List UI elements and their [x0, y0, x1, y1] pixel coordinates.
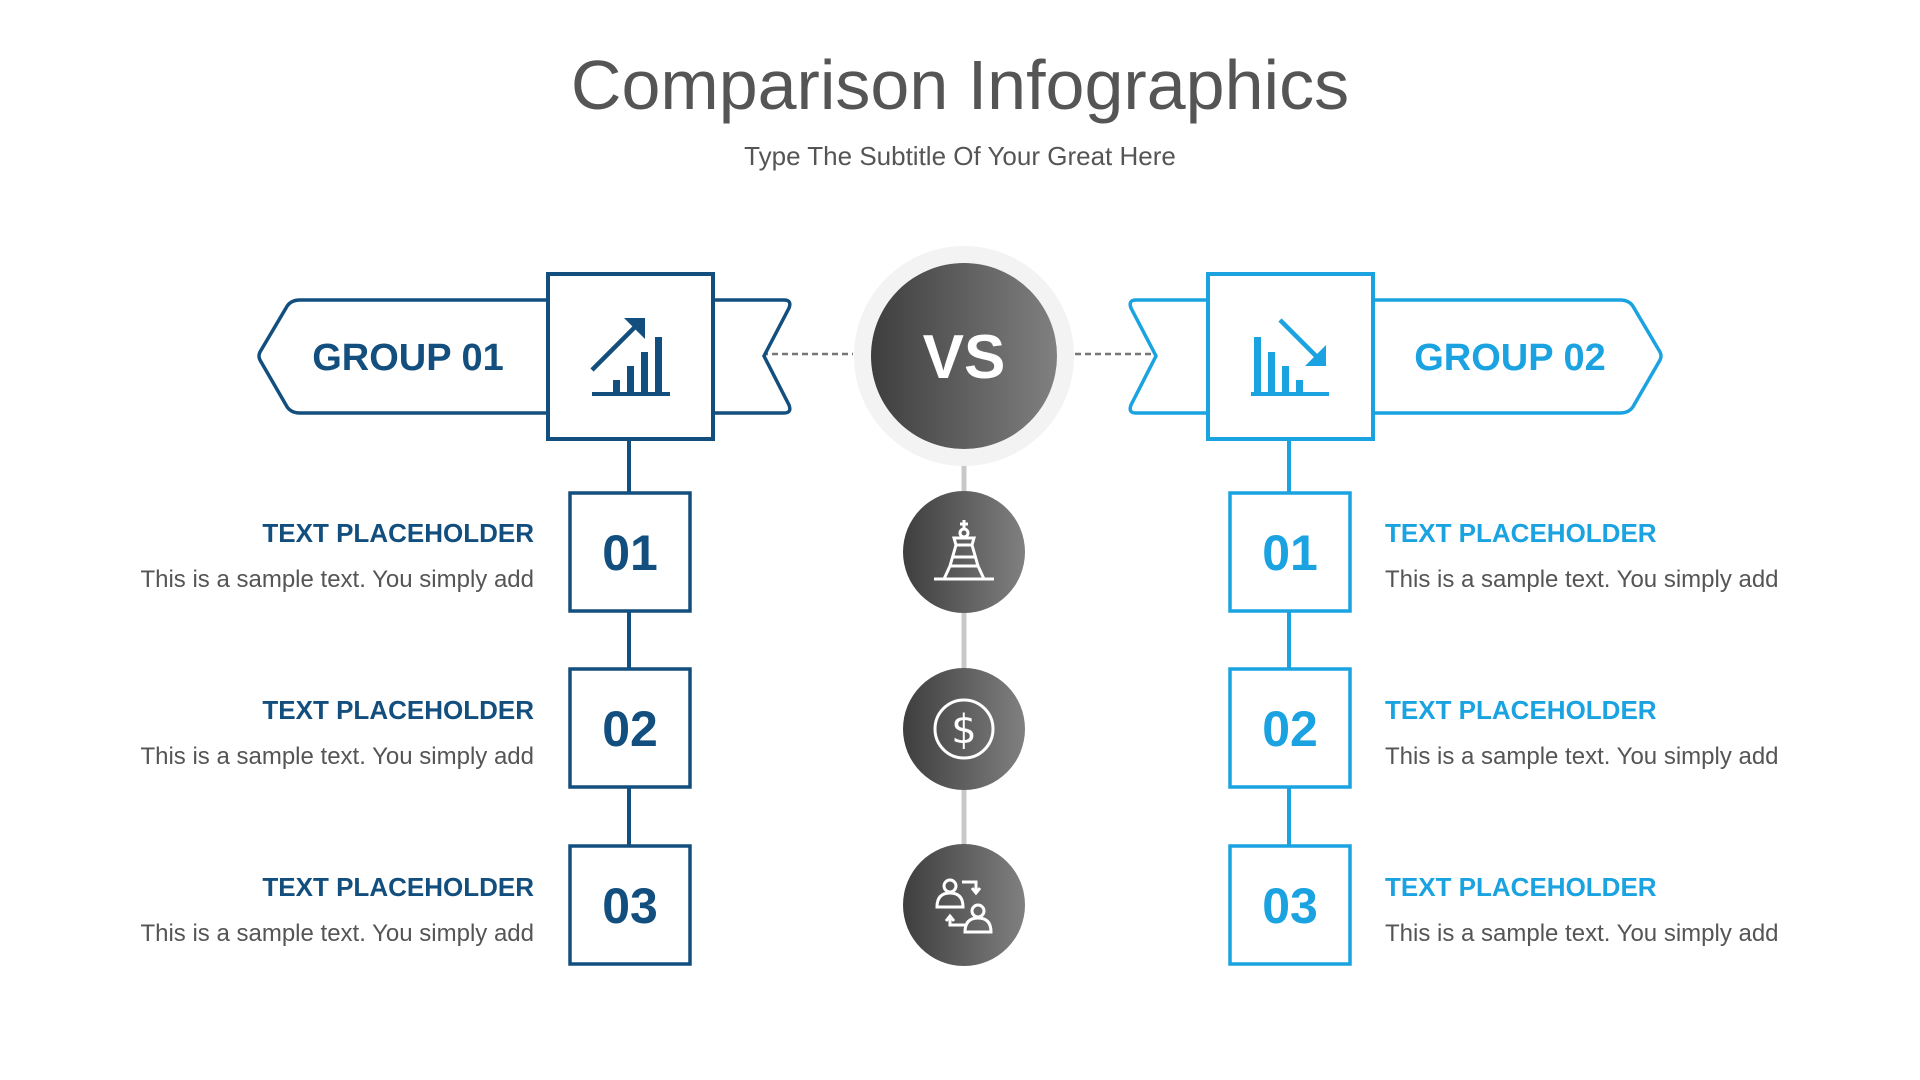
number boxes right: 03: [1262, 878, 1318, 934]
left text 1: TEXT PLACEHOLDER: [262, 518, 534, 548]
icon circle: dollar: [903, 668, 1025, 790]
title: Comparison Infographics: [571, 46, 1349, 124]
connectors: [629, 354, 1289, 905]
right text 2: [1385, 695, 1779, 770]
left text 2: This is a sample text. You simply add: [140, 743, 534, 770]
icon: growth chart: [592, 318, 670, 394]
banner: group 02: GROUP 02: [1414, 337, 1606, 379]
vs circle: VS: [923, 323, 1005, 392]
left text 2: TEXT PLACEHOLDER: [262, 695, 534, 725]
right text 3: TEXT PLACEHOLDER: [1385, 872, 1657, 902]
number boxes left: [570, 493, 690, 964]
left text 2: [140, 695, 534, 770]
left text 1: [140, 518, 534, 593]
number boxes right: [1230, 493, 1350, 964]
right text 2: This is a sample text. You simply add: [1385, 743, 1779, 770]
number boxes left: 03: [602, 878, 658, 934]
icon: decline chart: [1251, 320, 1329, 394]
icon circle: chess: [903, 491, 1025, 613]
banner: group 02: [1130, 274, 1661, 439]
right text 1: [1385, 518, 1779, 593]
banner: group 01: [259, 274, 790, 439]
left text 1: This is a sample text. You simply add: [140, 566, 534, 593]
left text 3: TEXT PLACEHOLDER: [262, 872, 534, 902]
right text 1: This is a sample text. You simply add: [1385, 566, 1779, 593]
number boxes left: 02: [602, 701, 658, 757]
number boxes right: 01: [1262, 525, 1318, 581]
right text 1: TEXT PLACEHOLDER: [1385, 518, 1657, 548]
vs circle: [854, 246, 1074, 466]
right text 3: This is a sample text. You simply add: [1385, 920, 1779, 947]
icon circle: people exchange: [903, 844, 1025, 966]
left text 3: This is a sample text. You simply add: [140, 920, 534, 947]
left text 3: [140, 872, 534, 947]
icon circle: dollar: $: [951, 707, 977, 753]
right text 2: TEXT PLACEHOLDER: [1385, 695, 1657, 725]
number boxes left: 01: [602, 525, 658, 581]
subtitle: Type The Subtitle Of Your Great Here: [744, 141, 1176, 171]
number boxes right: 02: [1262, 701, 1318, 757]
right text 3: [1385, 872, 1779, 947]
banner: group 01: GROUP 01: [312, 337, 504, 379]
